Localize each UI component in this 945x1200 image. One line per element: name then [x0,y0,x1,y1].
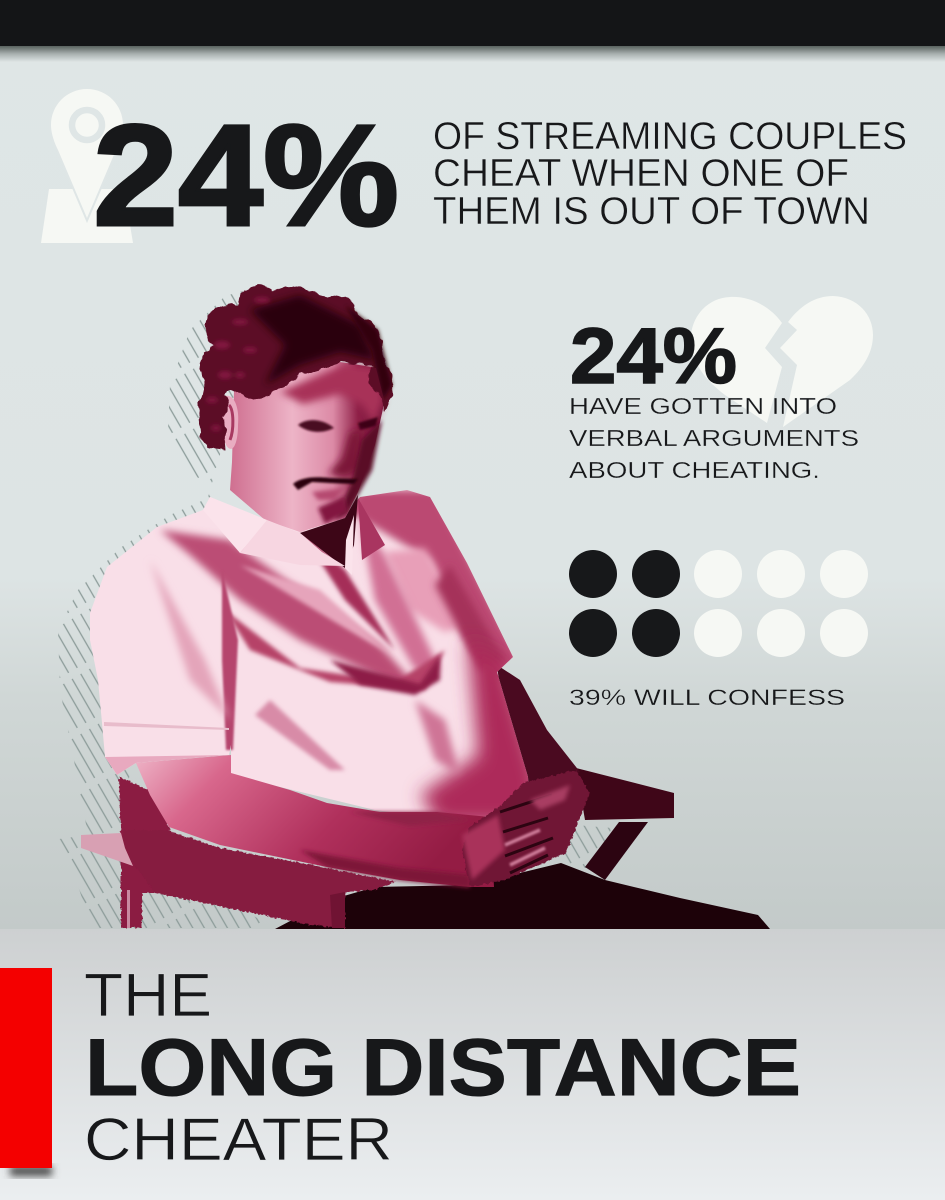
big statistic 24%: 24% [93,95,399,256]
dot chart caption: 39% WILL CONFESS [569,685,845,710]
shirt shading: lower right belly [420,640,540,825]
chair back and left leg [119,777,170,928]
chin shadow [318,496,348,524]
headline statistic description: CHEAT WHEN ONE OF [433,152,849,195]
trousers [275,863,770,929]
collar [203,497,385,575]
stat: 24% verbal arguments: VERBAL ARGUMENTS [569,425,859,451]
face [220,362,386,532]
stat: 24% verbal arguments: ABOUT CHEATING. [569,457,820,483]
stat: 24% verbal arguments: HAVE GOTTEN INTO [569,393,837,419]
bottom title band [0,929,945,1200]
title: THE [84,961,212,1029]
nose shadow [328,430,362,478]
forearm [136,755,494,888]
eyes [298,420,334,432]
shirt [80,480,540,825]
headline statistic description [433,115,907,233]
hands [462,770,590,887]
ear [220,396,238,449]
chair seat cushion [81,830,395,928]
icon: broken heart [691,296,873,427]
mouth [312,488,345,500]
stat: 24% verbal arguments: 24% [570,311,737,400]
title [84,961,801,1173]
headline statistic description: OF STREAMING COUPLES [433,115,907,158]
stat: 24% verbal arguments [569,311,859,483]
moustache [293,477,358,490]
dot chart: 39% confess [569,550,868,657]
red accent block [0,968,52,1176]
hair [198,285,395,450]
shirt shading: upper chest folds [160,530,420,690]
title: LONG DISTANCE [85,1023,801,1113]
background [0,0,945,930]
forehead shadow [280,364,384,425]
top black bar [0,0,945,62]
title: CHEATER [84,1106,393,1173]
icon: map pin [41,89,133,243]
behind arm [497,665,580,790]
shirt shading: left sleeve [222,570,238,750]
chair right arm and strut [576,768,674,880]
under chin neck shadow [300,495,358,568]
seated man illustration [80,285,770,929]
headline statistic description: THEM IS OUT OF TOWN [433,190,870,233]
shirt shading: right chest [345,490,520,680]
hatching behind figure [52,284,612,928]
